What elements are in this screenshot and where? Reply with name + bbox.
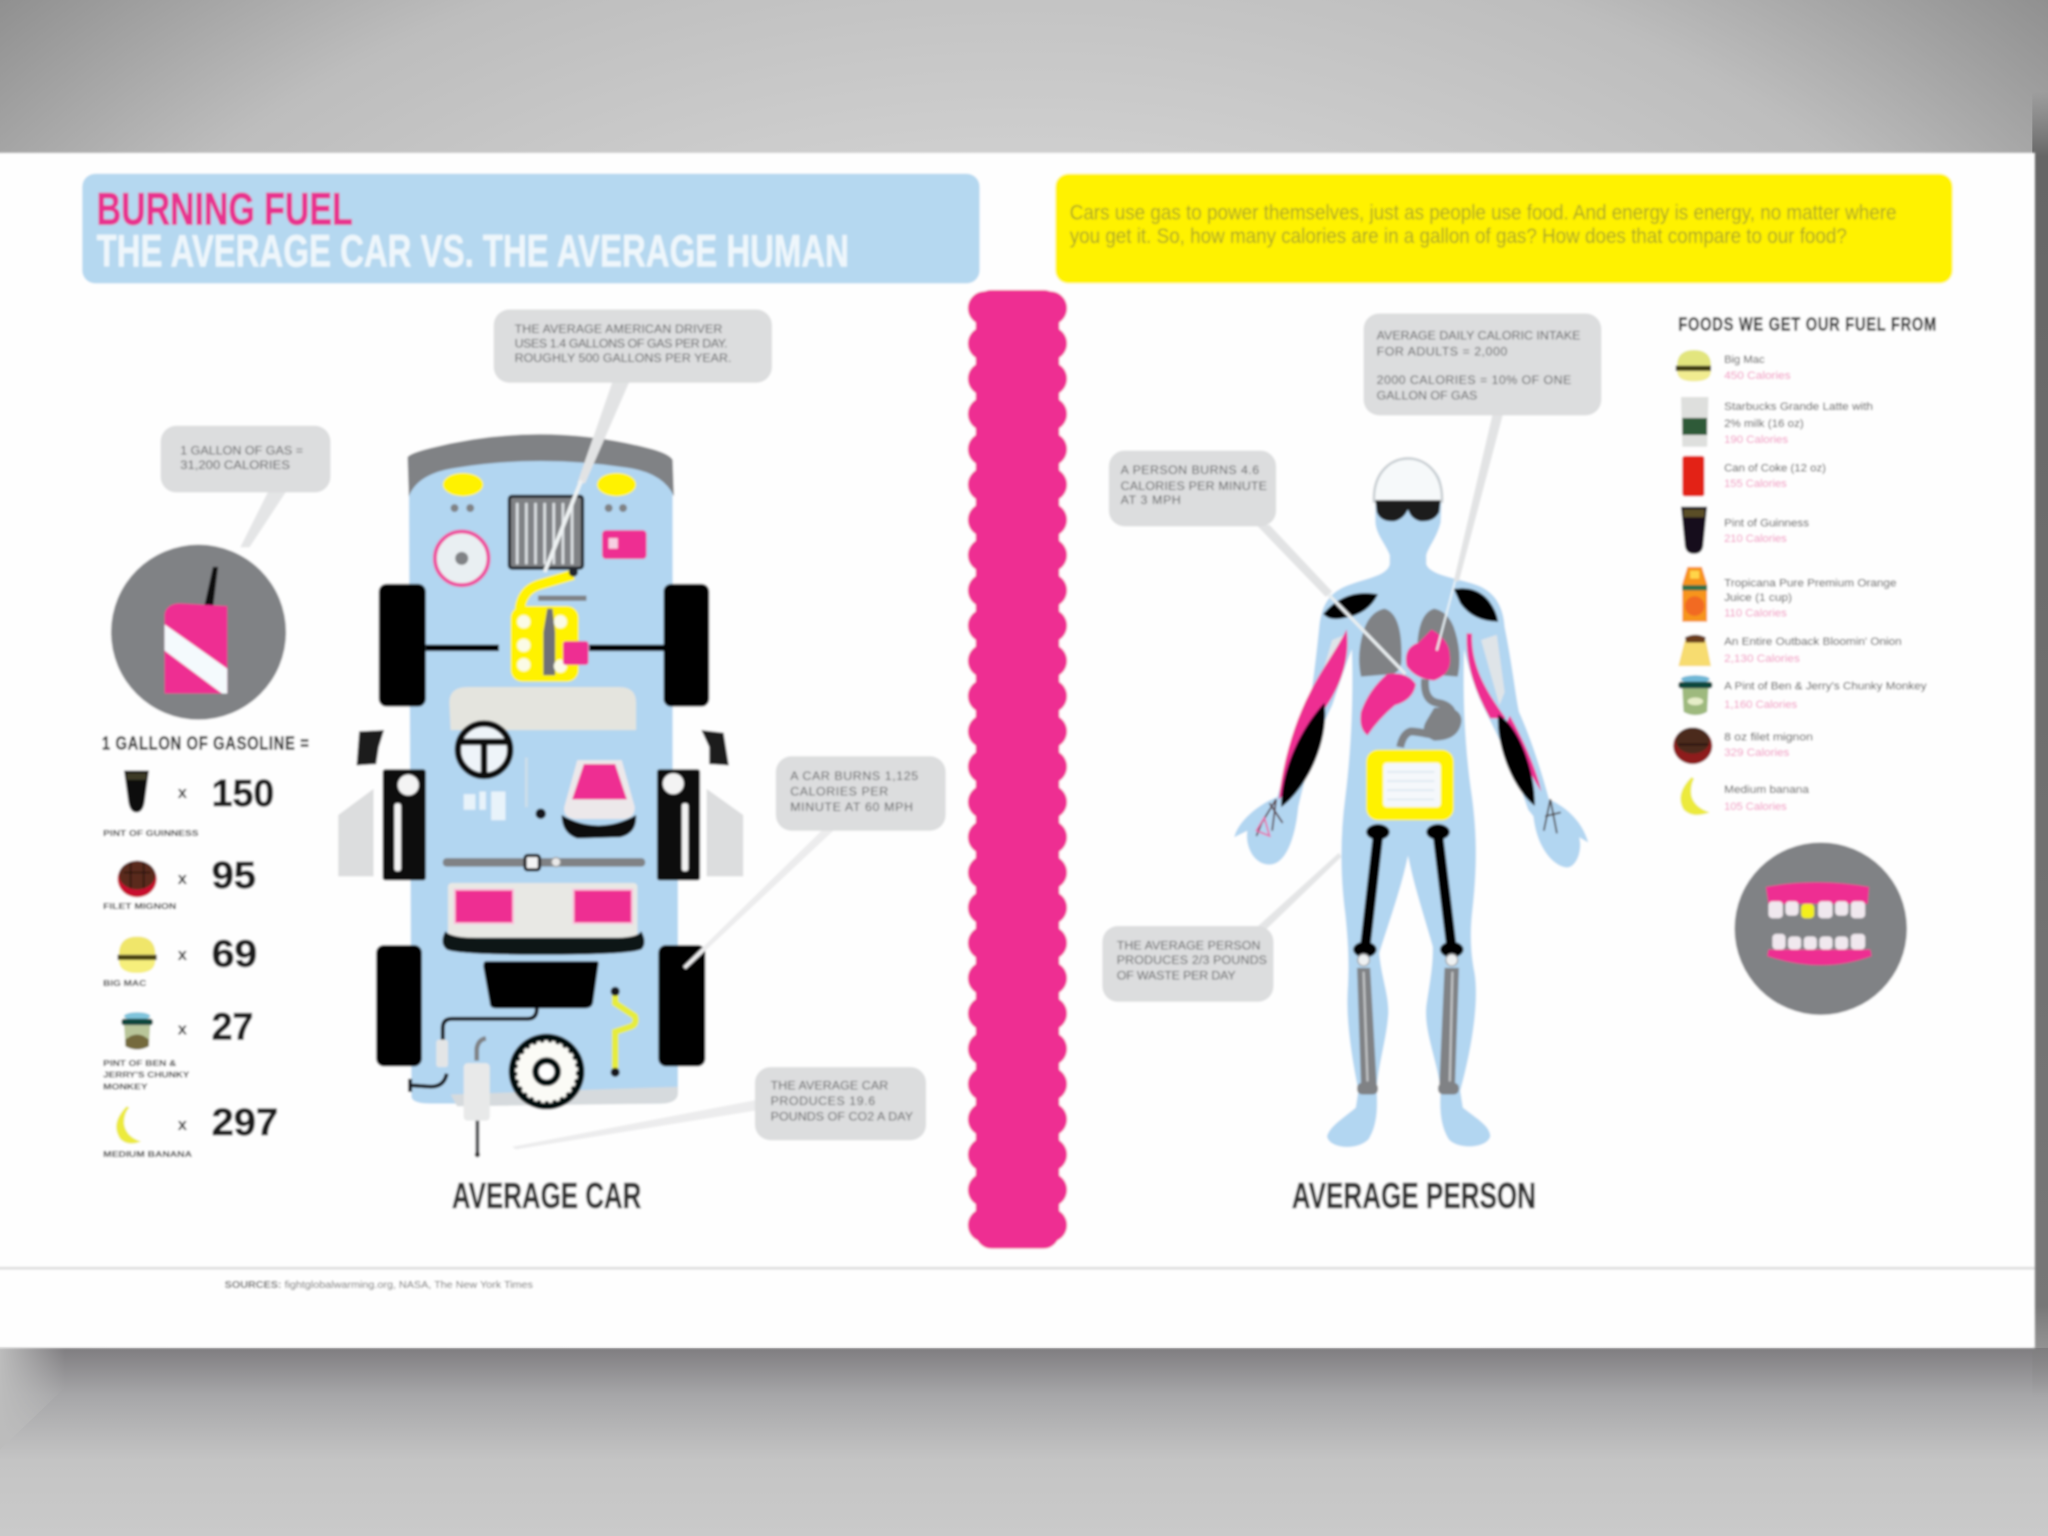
- food: tropicana: Juice (1 cup): [1724, 592, 1792, 604]
- food: big mac: 450 Calories: [1724, 370, 1791, 382]
- callout: car CO2: POUNDS OF CO2 A DAY: [771, 1110, 913, 1124]
- gauge disc: [435, 532, 488, 585]
- food: banana: 105 Calories: [1724, 801, 1787, 813]
- title banner: [82, 174, 980, 283]
- front wheels and axle: [379, 584, 709, 707]
- row: ben and jerry's 27: 27: [212, 1007, 253, 1049]
- callout: driver gas usage: USES 1.4 GALLONS OF GAS PER DAY.: [515, 336, 728, 350]
- food: big mac: Big Mac: [1724, 354, 1765, 366]
- intro banner: [1055, 174, 1953, 283]
- callout: person waste: OF WASTE PER DAY: [1117, 969, 1236, 983]
- callout: daily calorie intake: 2000 CALORIES = 10% OF ONE: [1377, 373, 1571, 387]
- callout: daily calorie intake: [1364, 313, 1601, 650]
- scalloped pink divider: [976, 290, 1059, 1249]
- liver: [1360, 674, 1416, 735]
- radiator: [509, 496, 583, 568]
- food: bloomin onion: [1678, 635, 1902, 666]
- exhaust system: [410, 1038, 490, 1157]
- intro text: you get it. So, how many calories are in a gallon of gas? How does that compare to our food?: [1070, 225, 1847, 248]
- food: starbucks: 2% milk (16 oz): [1724, 418, 1804, 430]
- callout: daily calorie intake: AVERAGE DAILY CALORIC INTAKE: [1377, 329, 1580, 343]
- brain: [1374, 458, 1442, 502]
- engine: [511, 568, 588, 682]
- callout: person calorie burn: CALORIES PER MINUTE: [1121, 479, 1267, 493]
- dashboard: [449, 687, 636, 730]
- pedals: [464, 758, 528, 820]
- headlights: [443, 473, 636, 512]
- stomach and esophagus: [1400, 679, 1453, 747]
- row: banana 297: x: [178, 1115, 188, 1134]
- steering wheel: [458, 724, 510, 776]
- food: filet mignon: 8 oz filet mignon: [1724, 732, 1813, 744]
- row: ben and jerry's 27: [103, 1007, 253, 1091]
- kneecaps: [1358, 954, 1458, 966]
- row: banana 297: 297: [212, 1102, 278, 1144]
- callout: car CO2: [512, 1067, 926, 1149]
- callout: car calorie burn: MINUTE AT 60 MPH: [790, 800, 913, 814]
- car diagram: [338, 434, 743, 1157]
- row: big mac 69: [103, 934, 257, 988]
- roof / windshield: [408, 434, 674, 496]
- row: big mac 69: 69: [212, 934, 257, 976]
- callout: driver gas usage: ROUGHLY 500 GALLONS PER YEAR.: [515, 351, 731, 365]
- icon: teeth in grey circle: [1735, 842, 1907, 1015]
- food: tropicana: 110 Calories: [1724, 607, 1787, 619]
- callout: person calorie burn: A PERSON BURNS 4.6: [1121, 463, 1259, 477]
- callout: car CO2: PRODUCES 19.6: [771, 1094, 875, 1108]
- spare wheel: [509, 1034, 584, 1110]
- icon: gas can in grey circle: [111, 545, 286, 720]
- fuel tank and pipe: [443, 961, 599, 1041]
- callout: person waste: THE AVERAGE PERSON: [1117, 939, 1260, 953]
- front seats / doors black: [383, 769, 700, 880]
- callout: car CO2: THE AVERAGE CAR: [771, 1078, 888, 1092]
- pink box: [602, 530, 647, 559]
- side mirrors: [357, 730, 729, 765]
- row: guinness 150: x: [178, 783, 188, 802]
- row: ben and jerry's 27: MONKEY: [103, 1082, 149, 1091]
- sources: SOURCES: fightglobalwarming.org, NASA, The New York Times: [225, 1280, 533, 1291]
- callout: calories per gallon: 1 GALLON OF GAS =: [180, 444, 303, 458]
- heading: average person: AVERAGE PERSON: [1292, 1175, 1536, 1216]
- rear shadow strip: [451, 1087, 678, 1106]
- intestines: [1366, 750, 1454, 820]
- shin bones: [1357, 968, 1459, 1095]
- food: bloomin onion: An Entire Outback Bloomin' Onion: [1724, 636, 1902, 648]
- callout: calories per gallon: [161, 426, 330, 547]
- heading: average car: AVERAGE CAR: [452, 1175, 641, 1216]
- row: ben and jerry's 27: PINT OF BEN &: [103, 1059, 177, 1068]
- food: tropicana: Tropicana Pure Premium Orange: [1724, 577, 1896, 589]
- food: guinness: Pint of Guinness: [1724, 517, 1809, 529]
- food: filet mignon: [1673, 728, 1813, 764]
- car body: [409, 447, 678, 1104]
- food: banana: [1680, 777, 1810, 815]
- black dot: [536, 808, 546, 819]
- row: guinness 150: [103, 771, 274, 838]
- callout: person calorie burn: AT 3 MPH: [1121, 493, 1181, 507]
- heading: gallon equivalents: 1 GALLON OF GASOLINE =: [102, 733, 310, 754]
- callout: car calorie burn: CALORIES PER: [790, 784, 888, 798]
- gear seat: [562, 760, 636, 839]
- food: coke: 155 Calories: [1724, 478, 1787, 490]
- row: filet mignon 95: 95: [212, 855, 256, 897]
- food: coke: [1682, 456, 1826, 496]
- food: guinness: [1681, 507, 1809, 554]
- food: ben and jerry's: 1,160 Calories: [1724, 699, 1798, 711]
- row: banana 297: [103, 1102, 278, 1159]
- row: ben and jerry's 27: JERRY'S CHUNKY: [103, 1071, 190, 1080]
- food: filet mignon: 329 Calories: [1724, 747, 1790, 759]
- callout: person calorie burn: [1109, 451, 1405, 674]
- row: ben and jerry's 27: x: [178, 1019, 188, 1038]
- callout: driver gas usage: [494, 310, 772, 572]
- lungs: [1359, 609, 1460, 677]
- row: filet mignon 95: [103, 855, 256, 911]
- callout: car calorie burn: [683, 756, 946, 969]
- callout: daily calorie intake: FOR ADULTS = 2,000: [1377, 344, 1507, 358]
- food: bloomin onion: 2,130 Calories: [1724, 653, 1800, 665]
- white sheet: [0, 153, 2035, 1348]
- food: coke: Can of Coke (12 oz): [1724, 463, 1826, 475]
- arm muscles: [1279, 630, 1541, 807]
- seat belt bar: [443, 856, 645, 870]
- callout: calories per gallon: 31,200 CALORIES: [180, 458, 290, 472]
- title line: burning fuel: BURNING FUEL: [97, 184, 353, 235]
- food: ben and jerry's: A Pint of Ben & Jerry's Chunky Monkey: [1724, 681, 1927, 693]
- food: tropicana: [1682, 567, 1896, 622]
- heading: foods: FOODS WE GET OUR FUEL FROM: [1678, 313, 1937, 334]
- thigh bones: [1353, 824, 1464, 957]
- food: starbucks: 190 Calories: [1724, 434, 1789, 446]
- row: banana 297: MEDIUM BANANA: [103, 1150, 192, 1159]
- intro text: Cars use gas to power themselves, just as people use food. And energy is energy, no matter where: [1070, 201, 1896, 224]
- row: filet mignon 95: x: [178, 869, 188, 888]
- food: starbucks: Starbucks Grande Latte with: [1724, 401, 1873, 413]
- sunglasses: [1375, 500, 1441, 521]
- food: ben and jerry's: [1678, 675, 1927, 715]
- row: filet mignon 95: FILET MIGNON: [103, 902, 177, 911]
- callout: driver gas usage: THE AVERAGE AMERICAN DRIVER: [515, 322, 722, 336]
- rear wheels: [376, 945, 705, 1066]
- rear suspension spring: [611, 987, 636, 1077]
- food: big mac: [1676, 350, 1791, 382]
- food: banana: Medium banana: [1724, 784, 1810, 796]
- human body diagram: [1234, 458, 1588, 1147]
- body silhouette: [1234, 460, 1588, 1147]
- heart: [1406, 630, 1450, 680]
- food: starbucks: [1681, 397, 1873, 447]
- car doors, grey: [338, 789, 743, 876]
- food: guinness: 210 Calories: [1724, 533, 1787, 545]
- hand bones: [1256, 799, 1561, 836]
- subtitle line: THE AVERAGE CAR VS. THE AVERAGE HUMAN: [97, 225, 849, 276]
- row: guinness 150: 150: [212, 773, 274, 815]
- pale arm tissue: [1317, 635, 1505, 712]
- row: guinness 150: PINT OF GUINNESS: [103, 829, 199, 838]
- rear seats: [442, 883, 645, 955]
- callout: person waste: [1102, 853, 1341, 1002]
- row: big mac 69: x: [178, 945, 188, 964]
- shoulder muscles: [1323, 588, 1498, 622]
- row: big mac 69: BIG MAC: [103, 979, 147, 988]
- callout: car calorie burn: A CAR BURNS 1,125: [790, 769, 918, 783]
- callout: person waste: PRODUCES 2/3 POUNDS: [1117, 953, 1267, 967]
- footer rule: [0, 1267, 2035, 1270]
- callout: daily calorie intake: GALLON OF GAS: [1377, 389, 1477, 403]
